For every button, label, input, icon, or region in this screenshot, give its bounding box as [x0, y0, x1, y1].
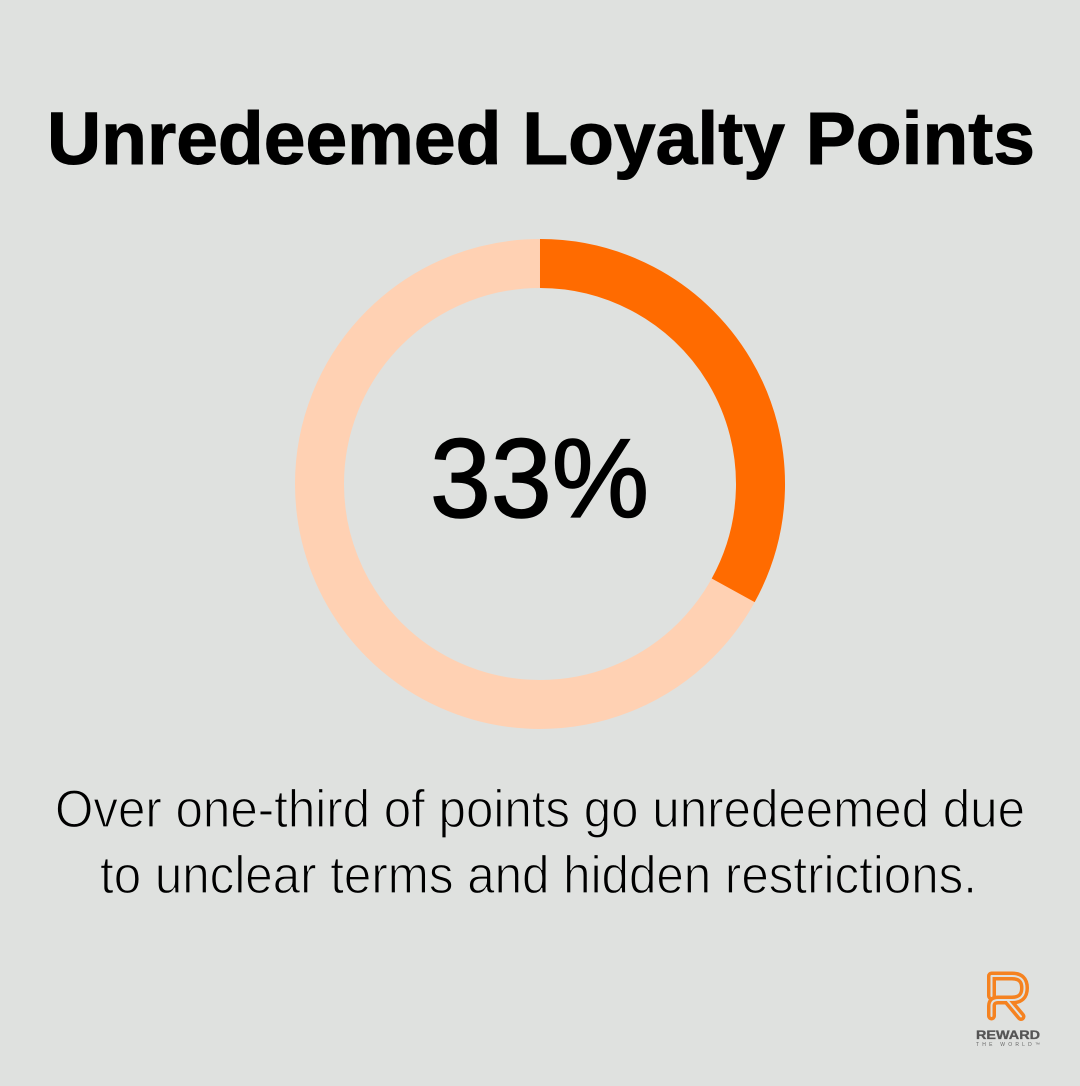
title: Unredeemed Loyalty Points: [47, 97, 1035, 180]
logo icon: R mark: [992, 976, 1024, 1016]
description text: to unclear terms and hidden restrictions.: [100, 846, 977, 905]
donut highlighted segment: [540, 264, 761, 590]
description text: [55, 780, 1025, 905]
description text: Over one-third of points go unredeemed due: [55, 780, 1025, 839]
donut track: [320, 264, 760, 704]
center value: 33%: [430, 416, 649, 541]
logo: Reward the World: [976, 976, 1040, 1048]
logo wordmark: REWARD: [976, 1028, 1040, 1042]
donut chart: 33%: [320, 264, 761, 704]
logo tagline: THE WORLD™: [976, 1042, 1040, 1048]
